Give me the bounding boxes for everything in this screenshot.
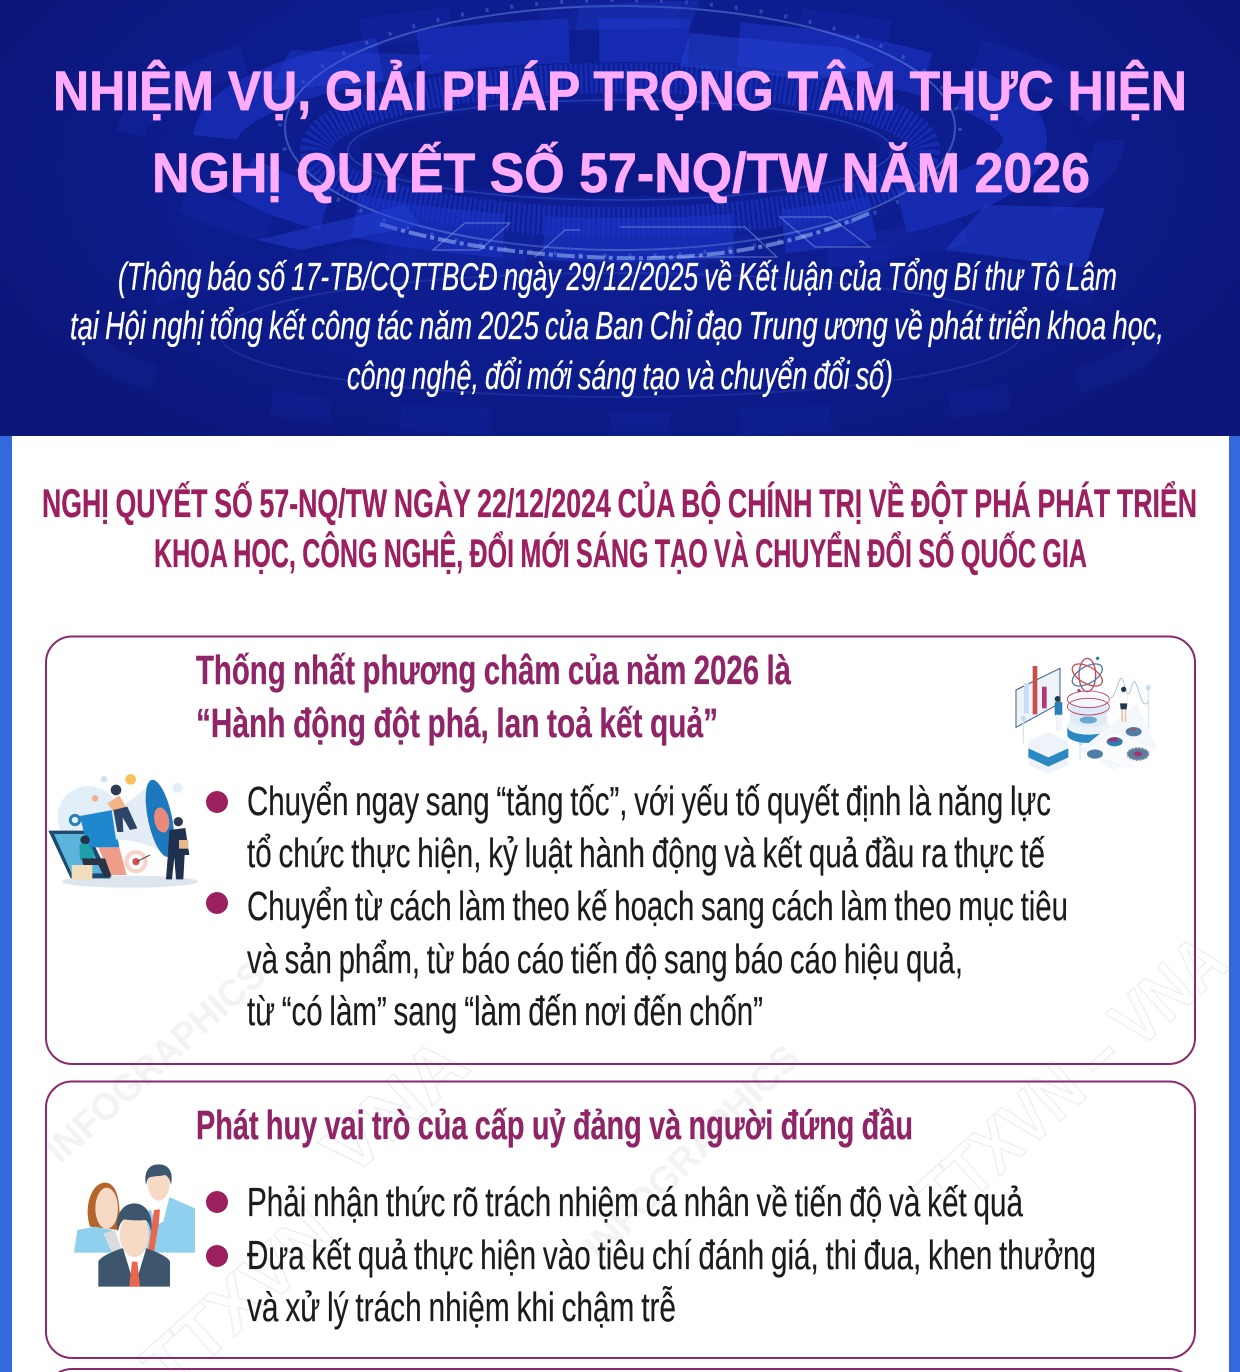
card 2 bullets bbox=[206, 1179, 1096, 1330]
icon: megaphone team illustration bbox=[48, 774, 198, 888]
card 1 bullets: và sản phẩm, từ báo cáo tiến độ sang báo cáo hiệu quả, bbox=[247, 936, 963, 982]
watermarks: INFOGRAPHICS bbox=[577, 1037, 808, 1268]
icon: science illustration bbox=[1016, 657, 1157, 773]
subtitle: công nghệ, đổi mới sáng tạo và chuyển đổi số) bbox=[347, 355, 893, 398]
panel: card 2 vai tro cap uy bbox=[46, 1082, 1195, 1358]
card 1 bullets: từ “có làm” sang “làm đến nơi đến chốn” bbox=[247, 988, 763, 1034]
title bbox=[53, 59, 1187, 204]
header banner bbox=[0, 0, 1240, 436]
watermarks: INFOGRAPHICS bbox=[38, 953, 274, 1172]
card 1 heading bbox=[196, 647, 791, 746]
subtitle bbox=[70, 256, 1164, 398]
icon: leadership group bbox=[74, 1164, 195, 1287]
card 1 heading: Thống nhất phương châm của năm 2026 là bbox=[196, 647, 791, 693]
section heading bbox=[42, 479, 1197, 576]
card 2 bullets: và xử lý trách nhiệm khi chậm trễ bbox=[247, 1284, 676, 1330]
card 1 bullets bbox=[206, 778, 1068, 1034]
card 1 heading: “Hành động đột phá, lan toả kết quả” bbox=[196, 700, 718, 746]
watermarks bbox=[38, 920, 1240, 1372]
card 2 heading: Phát huy vai trò của cấp uỷ đảng và người đứng đầu bbox=[196, 1102, 913, 1148]
watermarks: VNA bbox=[307, 1022, 483, 1192]
panel: card 3 top edge bbox=[46, 1369, 1195, 1372]
panel: card 1 phuong cham bbox=[46, 636, 1195, 1064]
title: NGHỊ QUYẾT SỐ 57-NQ/TW NĂM 2026 bbox=[152, 141, 1090, 204]
